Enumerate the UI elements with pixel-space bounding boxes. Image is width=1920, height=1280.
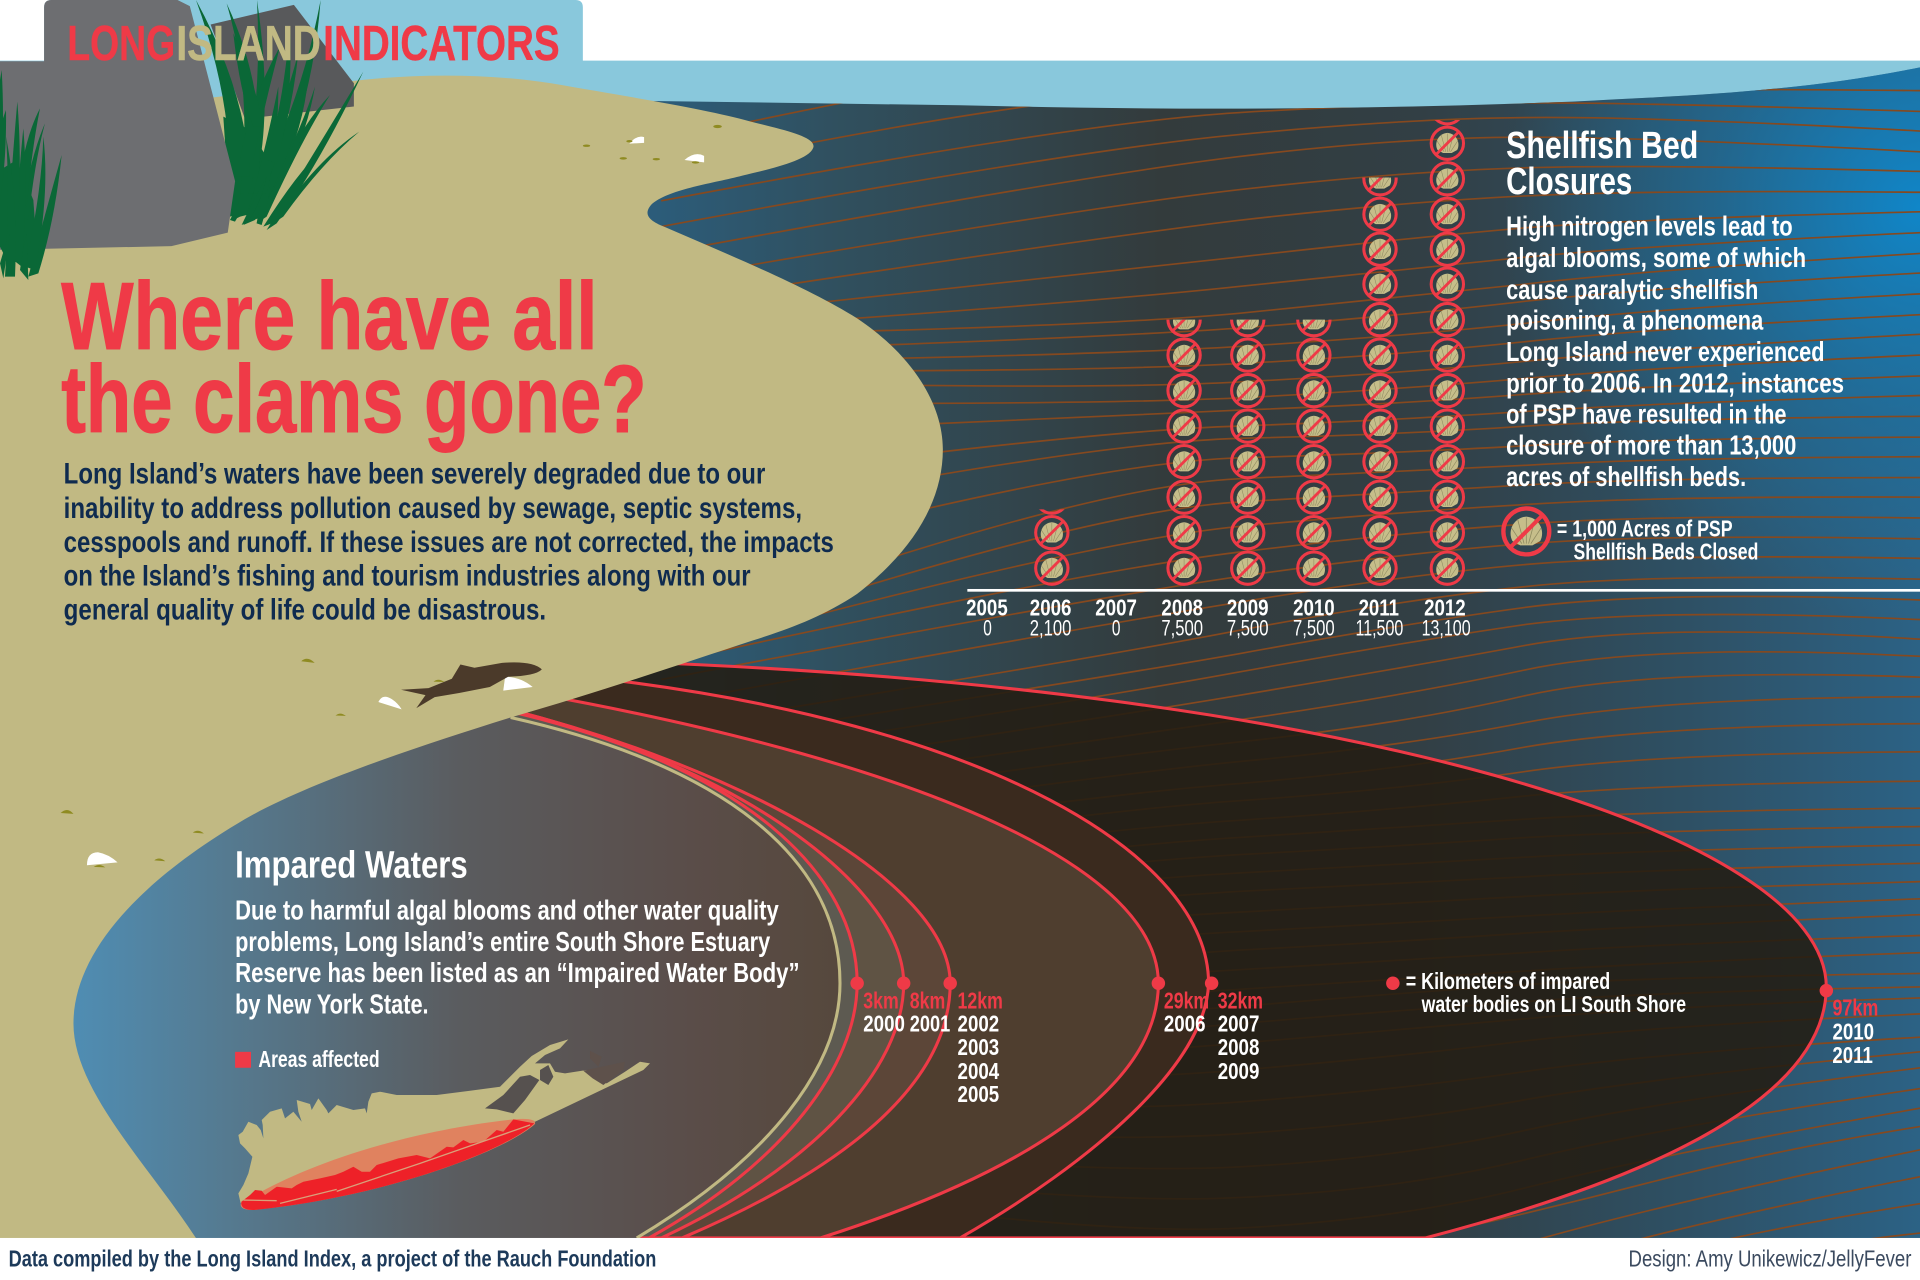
chart acreage values: 7,500 — [1161, 616, 1203, 641]
pictogram column: 2011 — [1364, 163, 1396, 584]
intro paragraph: Long Island’s waters have been severely degraded due to our — [64, 458, 765, 491]
intro paragraph: inability to address pollution caused by sewage, septic systems, — [64, 492, 802, 525]
water body with gradient — [490, 67, 1920, 1238]
chart year labels: 2005 — [966, 594, 1008, 620]
oval cream outline — [511, 718, 840, 1238]
chart acreage values: 7,500 — [1227, 616, 1269, 641]
heading: impaired waters: Impared Waters — [235, 844, 468, 886]
ring year labels: 2008 — [1218, 1034, 1259, 1060]
shellfish text block: prior to 2006. In 2012, instances — [1506, 367, 1844, 398]
legend: shell icon key: = 1,000 Acres of PSP — [1557, 515, 1733, 541]
impaired waters text block: by New York State. — [235, 988, 429, 1019]
ring distance labels: 8km — [910, 987, 945, 1013]
legend: kilometers marker: water bodies on LI South Shore — [1421, 991, 1686, 1017]
shellfish text block: Long Island never experienced — [1506, 336, 1824, 367]
intro paragraph: on the Island’s fishing and tourism industries along with our — [64, 559, 751, 592]
intro paragraph: cesspools and runoff. If these issues are not corrected, the impacts — [64, 526, 834, 559]
concentric impaired water rings — [490, 661, 1826, 1238]
ring year labels: 2009 — [1218, 1058, 1259, 1084]
chart acreage values: 13,100 — [1422, 616, 1471, 641]
chart acreage values — [983, 616, 1471, 641]
ring year labels: 2006 — [1164, 1011, 1206, 1037]
intro paragraph: general quality of life could be disastrous. — [64, 594, 546, 627]
pictogram column: 2012 — [1431, 92, 1464, 584]
header tab title: ISLAND — [176, 17, 321, 71]
heading: shellfish bed closures: Shellfish Bed — [1506, 125, 1698, 167]
rock: front — [0, 0, 235, 250]
intro paragraph — [64, 458, 834, 627]
heading: shellfish bed closures: Closures — [1506, 161, 1632, 203]
impaired waters text block — [235, 895, 800, 1019]
shellfish text block: of PSP have resulted in the — [1506, 399, 1787, 430]
chart year labels: 2011 — [1359, 594, 1399, 620]
shellfish text block: poisoning, a phenomena — [1506, 304, 1764, 335]
impaired waters text block: problems, Long Island’s entire South Shore Estuary — [235, 926, 771, 957]
pictogram column: 2008 — [1168, 303, 1200, 584]
ring year labels: 2004 — [958, 1058, 999, 1084]
shellfish text block — [1506, 211, 1844, 492]
legend: kilometers marker — [1386, 968, 1686, 1017]
legend: areas affected — [235, 1046, 380, 1072]
grass: right cluster — [196, 0, 363, 230]
ring year labels: 2000 — [863, 1011, 905, 1037]
legend: areas affected: Areas affected — [258, 1046, 380, 1072]
ring year labels: 2011 — [1832, 1042, 1873, 1068]
pictogram column: 2009 — [1232, 303, 1264, 584]
footer band — [0, 1238, 1920, 1280]
ring year labels: 2002 — [958, 1011, 999, 1037]
ring distance labels: 97km — [1832, 995, 1878, 1021]
legend: shell icon key: Shellfish Beds Closed — [1573, 539, 1758, 565]
beach shells and pebbles — [583, 125, 722, 164]
impaired waters text block: Due to harmful algal blooms and other water quality — [235, 895, 779, 926]
ring year labels — [863, 1011, 1874, 1107]
main title: Where have all — [61, 264, 598, 370]
chart axis line — [967, 589, 1920, 592]
ring distance labels: 29km — [1164, 987, 1209, 1013]
ring year labels: 2010 — [1832, 1019, 1874, 1045]
chart acreage values: 11,500 — [1356, 616, 1403, 641]
icon: fish — [401, 662, 542, 708]
chart year labels — [966, 594, 1466, 620]
ring year labels: 2001 — [910, 1011, 950, 1037]
chart year labels: 2012 — [1424, 594, 1466, 620]
chart year labels: 2010 — [1293, 594, 1335, 620]
chart acreage values: 7,500 — [1293, 616, 1335, 641]
footer: data source: Data compiled by the Long Island Index, a project of the Rauch Foundation — [9, 1246, 656, 1272]
chart year labels: 2008 — [1161, 594, 1203, 620]
impaired waters text block: Reserve has been listed as an “Impaired Water Body” — [235, 957, 800, 988]
pictogram column: 2010 — [1298, 303, 1330, 584]
legend: kilometers marker: = Kilometers of impared — [1406, 968, 1610, 994]
chart year labels: 2009 — [1227, 594, 1269, 620]
chart acreage values: 0 — [983, 616, 992, 641]
shellfish text block: High nitrogen levels lead to — [1506, 211, 1793, 242]
shellfish text block: cause paralytic shellfish — [1506, 274, 1758, 305]
header tab title — [67, 17, 560, 71]
chart acreage values: 0 — [1112, 616, 1120, 641]
chart year labels: 2007 — [1095, 594, 1137, 620]
ring distance labels — [863, 987, 1878, 1021]
shellfish text block: algal blooms, some of which — [1506, 242, 1806, 273]
shellfish text block: closure of more than 13,000 — [1506, 429, 1796, 460]
sandy beach — [0, 76, 943, 1238]
ring markers — [850, 977, 1833, 997]
rock: back — [211, 5, 354, 119]
ring distance labels: 3km — [863, 987, 899, 1013]
legend: shell icon key — [1503, 508, 1758, 565]
ring year labels: 2007 — [1218, 1011, 1259, 1037]
heading: shellfish bed closures — [1506, 125, 1698, 203]
ring year labels: 2003 — [958, 1034, 999, 1060]
main title: the clams gone? — [61, 347, 647, 453]
shellfish text block: acres of shellfish beds. — [1506, 461, 1746, 492]
pictogram column: 2006 — [1034, 509, 1070, 586]
water current lines — [661, 49, 1920, 1276]
grass: left cluster — [0, 70, 62, 280]
lower beach shells and pebbles — [61, 659, 533, 867]
header tab title: LONG — [67, 17, 175, 71]
ring year labels: 2005 — [958, 1081, 999, 1107]
chart acreage values: 2,100 — [1030, 616, 1071, 641]
ring distance labels: 12km — [958, 987, 1003, 1013]
impaired waters oval — [0, 718, 840, 1238]
main title — [61, 264, 647, 453]
chart year labels: 2006 — [1030, 594, 1071, 620]
ring distance labels: 32km — [1218, 987, 1263, 1013]
map: Long Island — [238, 1039, 650, 1210]
header tab title: INDICATORS — [323, 17, 560, 71]
